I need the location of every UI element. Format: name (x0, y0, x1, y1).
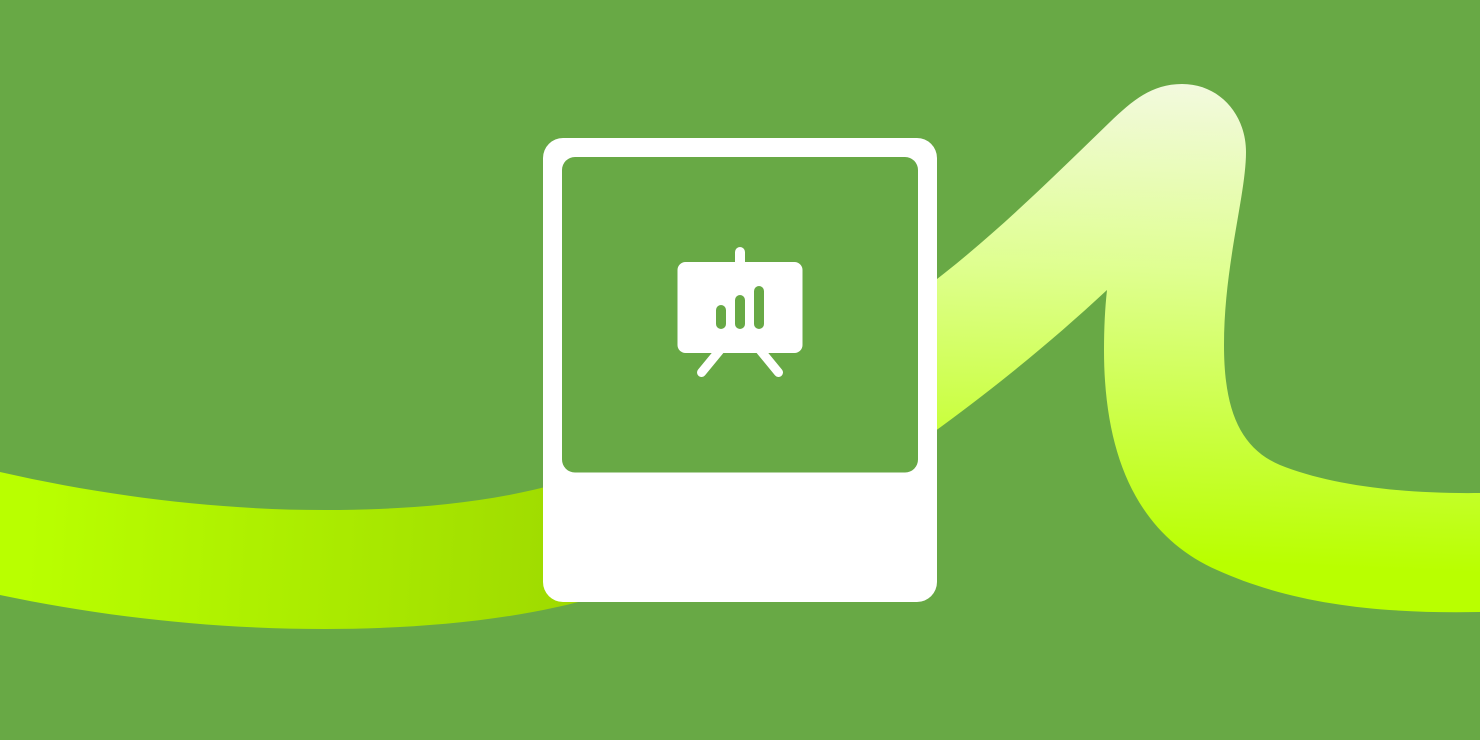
ribbon: right segment (920, 84, 1480, 612)
icon: easel legs (702, 350, 778, 372)
ribbon: left segment (0, 472, 600, 629)
card frame (543, 138, 937, 602)
icon: board top peg (735, 247, 745, 271)
card window (562, 157, 918, 472)
icon: presentation board with bar chart (678, 247, 802, 372)
card (543, 138, 937, 602)
icon: chart bars (716, 286, 764, 329)
icon: board (678, 262, 802, 353)
